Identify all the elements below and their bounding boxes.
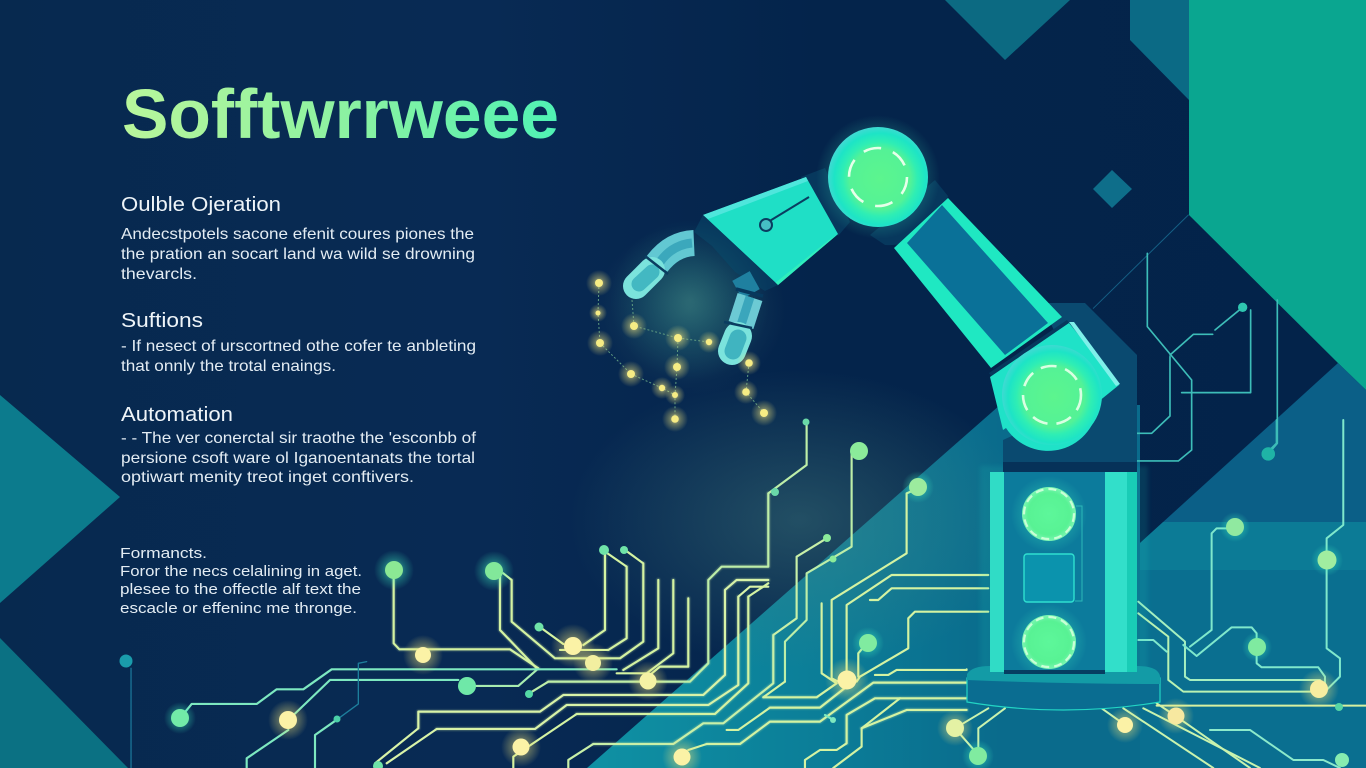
tower column: [980, 462, 1148, 680]
shoulder joint: [990, 322, 1120, 451]
forearm: [694, 168, 850, 291]
elbow joint: [816, 115, 940, 239]
footer note: [120, 545, 362, 617]
tower housing: [1003, 303, 1137, 472]
footer note: escacle or effeninc me thronge.: [120, 600, 357, 617]
section: Oulble Ojeration: thevarcls.: [121, 266, 197, 283]
section: Oulble Ojeration: [121, 194, 475, 283]
small diamond: [1093, 170, 1132, 208]
robot arm: [610, 115, 1160, 710]
circuit nodes: [120, 418, 1349, 768]
section: Suftions: [121, 310, 476, 375]
section: Suftions: - If nesect of urscortned othe cofer te anbleting: [121, 338, 476, 355]
circuit traces: left and centre: [131, 422, 988, 768]
section: Automation: Automation: [121, 404, 233, 426]
section: Automation: [121, 404, 477, 486]
section: Suftions: Suftions: [121, 310, 203, 332]
footer note: Foror the necs celalining in aget.: [120, 563, 362, 580]
glowing junction nodes: [268, 624, 1339, 768]
section: Oulble Ojeration: Andecstpotels sacone efenit coures piones the: [121, 226, 474, 243]
glow under circuit traces: [394, 493, 967, 744]
circuit traces: around tower: [955, 420, 1366, 768]
footer note: plesee to the offectle alf text the: [120, 581, 361, 598]
footer note: Formancts.: [120, 545, 207, 562]
section: Automation: - - The ver conerctal sir traothe the 'esconbb of: [121, 430, 477, 447]
background haze: [570, 225, 1030, 670]
section: Oulble Ojeration: Oulble Ojeration: [121, 194, 281, 216]
hand fingers: [610, 220, 770, 380]
tower base: [967, 666, 1160, 710]
section: Automation: persione csoft ware ol Iganoentanats the tortal: [121, 450, 475, 467]
title: Sofftwrrweee: [122, 75, 559, 153]
section: Automation: optiwart menity treot inget conftivers.: [121, 469, 414, 486]
section: Oulble Ojeration: the pration an socart land wa wild se drowning: [121, 246, 475, 263]
section: Suftions: that onnly the trotal enaings.: [121, 358, 336, 375]
constellation of glowing dots near hand: [586, 270, 777, 432]
upper arm: [870, 180, 1069, 376]
thin upper right circuit: [1093, 215, 1277, 461]
